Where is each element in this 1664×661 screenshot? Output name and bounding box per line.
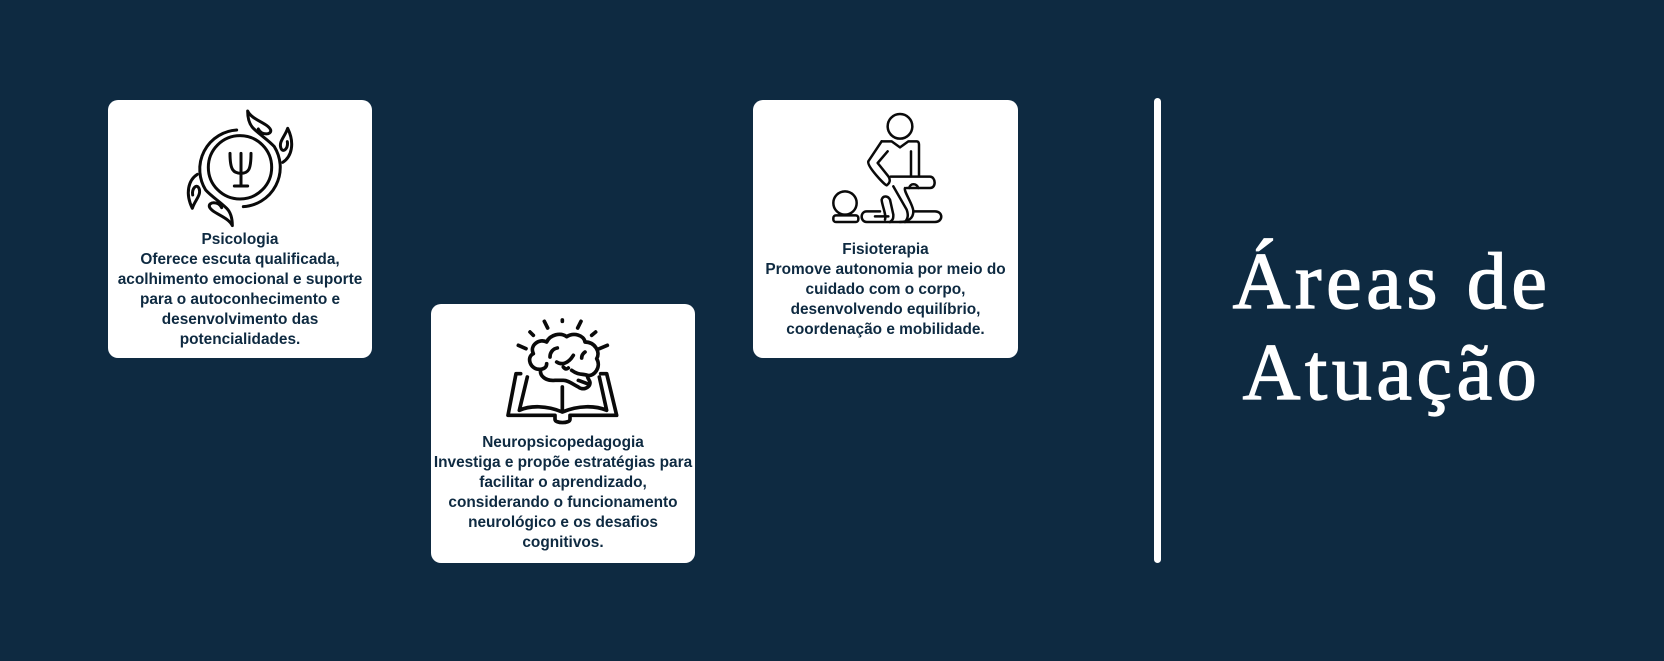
title: Áreas de Atuação: Áreas de	[1233, 238, 1551, 326]
text: Fisioterapia description: desenvolvendo equilíbrio,	[791, 301, 980, 318]
text: Fisioterapia description: Promove autonomia por meio do	[765, 261, 1006, 278]
text: Psicologia description: desenvolvimento das	[162, 311, 318, 328]
text: Neuropsicopedagogia description: facilitar o aprendizado,	[479, 474, 647, 491]
text: Neuropsicopedagogia description: considerando o funcionamento	[448, 494, 678, 511]
title: Áreas de Atuação: Atuação	[1243, 329, 1541, 417]
panel: Neuropsicopedagogia	[431, 304, 695, 563]
text: Psicologia description: Oferece escuta qualificada,	[140, 251, 340, 268]
text: Fisioterapia description: coordenação e mobilidade.	[786, 321, 985, 338]
text: Neuropsicopedagogia description: cognitivos.	[522, 534, 604, 551]
vertical divider	[1154, 98, 1161, 563]
text: Neuropsicopedagogia description: Investiga e propõe estratégias para	[434, 454, 692, 471]
text: Psicologia description: acolhimento emocional e suporte	[118, 271, 362, 288]
text: Fisioterapia description	[765, 261, 1006, 338]
text: Fisioterapia description: cuidado com o corpo,	[806, 281, 965, 298]
text: Psicologia description: potencialidades.	[180, 331, 300, 348]
heading: Neuropsicopedagogia: Neuropsicopedagogia	[482, 434, 644, 451]
icon: physiotherapist treating patient	[832, 112, 942, 224]
text: Neuropsicopedagogia description: neurológico e os desafios	[468, 514, 658, 531]
text: Psicologia description: para o autoconhecimento e	[140, 291, 340, 308]
title: Áreas de Atuação	[1232, 238, 1551, 417]
text: Neuropsicopedagogia description	[434, 454, 692, 551]
heading: Psicologia: Psicologia	[202, 231, 278, 248]
text: Psicologia description	[118, 251, 362, 348]
panel: Fisioterapia	[753, 100, 1018, 358]
icon: brain over open book	[506, 318, 618, 424]
icon: psi symbol with leaves	[186, 110, 294, 228]
panel: Psicologia	[108, 100, 372, 358]
heading: Fisioterapia: Fisioterapia	[842, 241, 929, 258]
